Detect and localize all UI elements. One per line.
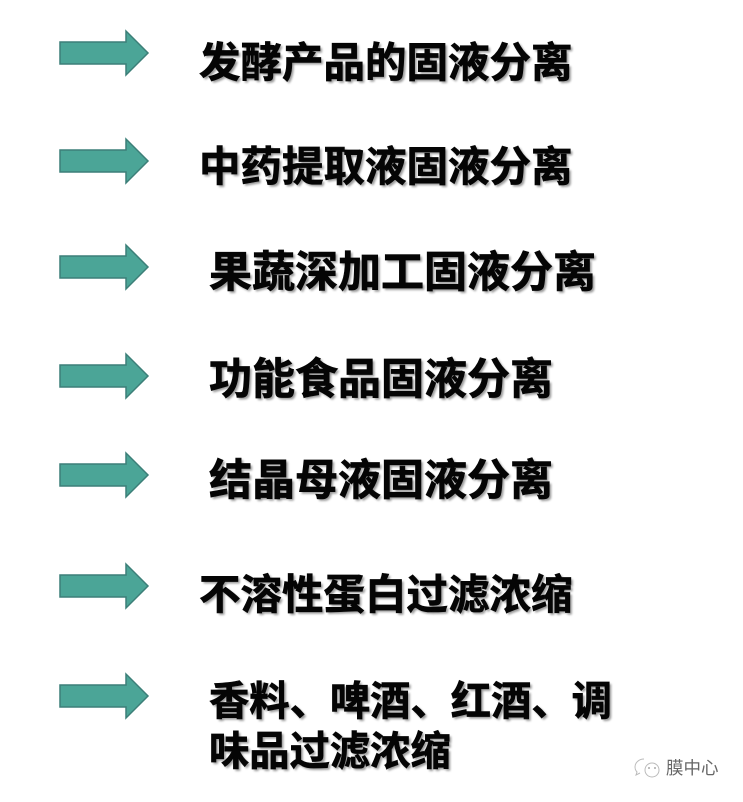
arrow 3 xyxy=(59,243,149,291)
heading: spices, beer, wine, seasonings xyxy=(209,679,612,774)
heading: fermentation products: 发酵产品的固液分离 xyxy=(199,39,573,86)
arrow 1 xyxy=(59,29,149,77)
arrow 4 xyxy=(59,352,149,400)
arrow 2 xyxy=(59,137,149,185)
heading: insoluble protein: 不溶性蛋白过滤浓缩 xyxy=(199,571,573,618)
arrow 7 xyxy=(59,672,149,720)
heading: crystallization mother liquor: 结晶母液固液分离 xyxy=(209,457,553,505)
watermark xyxy=(634,758,718,778)
arrow 5 xyxy=(59,451,149,499)
heading: fruit and vegetable processing: 果蔬深加工固液分离 xyxy=(209,249,596,297)
heading: herbal extract: 中药提取液固液分离 xyxy=(199,143,573,190)
watermark text: 膜中心 xyxy=(666,758,718,778)
heading: functional foods: 功能食品固液分离 xyxy=(209,356,553,404)
heading: spices, beer, wine, seasonings: 香料、啤酒、红酒、调 xyxy=(209,679,612,724)
icon: chat bubbles xyxy=(634,758,660,778)
heading: spices, beer, wine, seasonings: 味品过滤浓缩 xyxy=(209,728,451,774)
arrow 6 xyxy=(59,562,149,610)
